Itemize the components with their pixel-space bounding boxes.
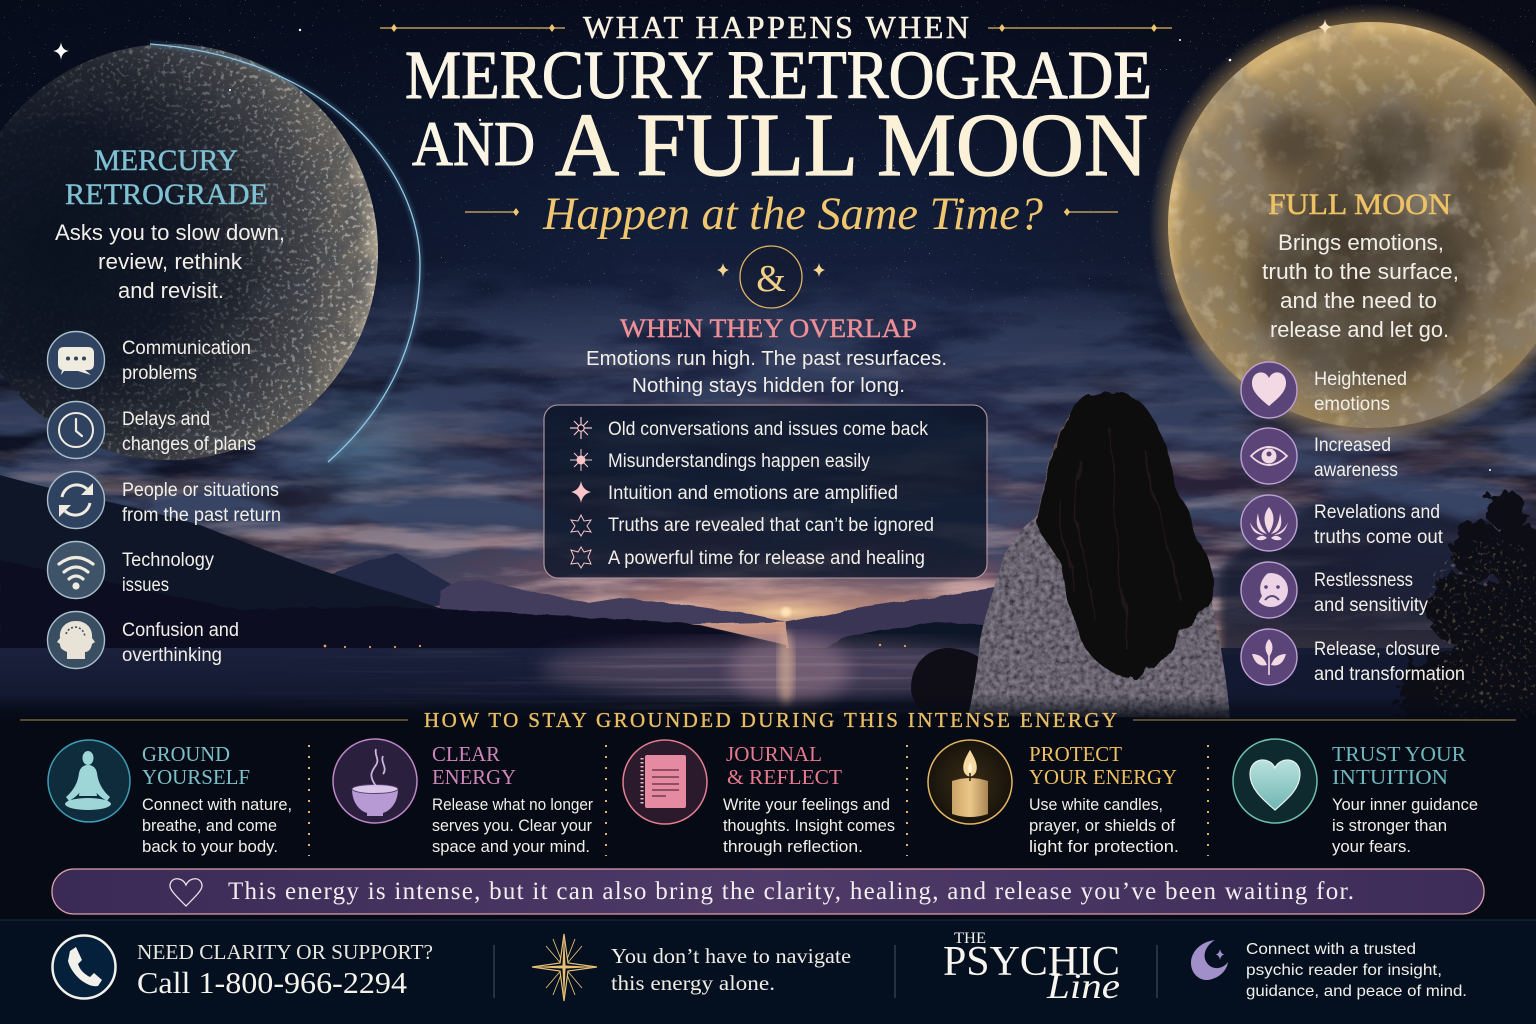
panel: full moon: [1241, 188, 1465, 685]
mercury item: delays: [48, 402, 256, 458]
full moon heading: FULL MOON: [1268, 188, 1451, 221]
moon item: revelations: truths come out: [1314, 527, 1444, 548]
mercury item: technology: [48, 542, 214, 598]
decorative sparkle stars: [53, 19, 1491, 471]
connect message: Connect with a trusted: [1246, 941, 1416, 958]
tip: trust your intuition: [1233, 739, 1478, 856]
mercury item: delays: Delays and: [122, 409, 210, 430]
tip: journal and reflect: [623, 740, 895, 856]
mercury item: past returns: [48, 472, 281, 528]
tip: protect your energy: light for protection.: [1029, 837, 1179, 856]
mercury description: and revisit.: [118, 278, 224, 303]
mercury item: past returns: from the past return: [122, 505, 281, 526]
mercury item: technology: issues: [122, 575, 169, 596]
call to action: Call 1-800-966-2294: [137, 965, 408, 1000]
panel: mercury retrograde: [48, 144, 285, 668]
mercury item: communication: problems: [122, 363, 197, 384]
full moon description: Brings emotions,: [1278, 230, 1444, 255]
tip: protect your energy: prayer, or shields of: [1029, 816, 1175, 835]
tip: clear energy: [333, 739, 593, 856]
tip: clear energy: space and your mind.: [432, 837, 590, 856]
overlap intro: Nothing stays hidden for long.: [632, 375, 905, 397]
connect message: [1191, 940, 1467, 1000]
tip: ground yourself: YOURSELF: [142, 765, 250, 789]
moon item: release: and transformation: [1314, 664, 1465, 685]
overlap list items: [608, 419, 934, 569]
overlap list star icons: [570, 417, 592, 568]
mercury description: Asks you to slow down,: [55, 220, 285, 245]
moon item: awareness: Increased: [1314, 435, 1391, 456]
section heading: stay grounded: HOW TO STAY GROUNDED DURING THIS INTENSE ENERGY: [424, 708, 1117, 732]
moon item: revelations: Revelations and: [1314, 502, 1440, 523]
lower dark band: [0, 695, 1536, 920]
moon item: revelations: [1241, 495, 1444, 551]
overlap heading: WHEN THEY OVERLAP: [620, 314, 917, 343]
ampersand badge: &: [756, 258, 786, 300]
logo: the psychic line: [943, 930, 1120, 1006]
title line 3 right: A FULL MOON: [555, 96, 1148, 195]
illustration: mountains, lake and trees: [0, 475, 1536, 750]
moon item: restlessness: and sensitivity: [1314, 595, 1428, 616]
moon item: emotions: Heightened: [1314, 369, 1407, 390]
tip: trust your intuition: TRUST YOUR: [1332, 742, 1466, 766]
mercury item: delays: changes of plans: [122, 434, 256, 455]
full moon description: and the need to: [1280, 288, 1437, 313]
quote banner: [52, 869, 1484, 914]
tip: protect your energy: [928, 740, 1179, 856]
reassurance message: [532, 934, 851, 1001]
subtitle: Happen at the Same Time?: [542, 188, 1043, 240]
mercury item: overthinking: [48, 612, 239, 668]
tip: journal and reflect: & REFLECT: [727, 765, 842, 789]
overlap list box: [544, 405, 987, 578]
tip: trust your intuition: INTUITION: [1332, 765, 1448, 789]
tip: clear energy: Release what no longer: [432, 795, 593, 814]
moon item: emotions: [1241, 362, 1407, 418]
mercury item: technology: Technology: [122, 550, 214, 571]
mercury heading: MERCURY: [94, 144, 238, 177]
moon item: restlessness: Restlessness: [1314, 570, 1413, 591]
tip: trust your intuition: is stronger than: [1332, 816, 1447, 835]
illustration: full moon: [1149, 3, 1536, 447]
mercury description: [55, 220, 285, 303]
tip: protect your energy: Use white candles,: [1029, 795, 1163, 814]
full moon description: truth to the surface,: [1262, 259, 1459, 284]
connect message: psychic reader for insight,: [1246, 962, 1442, 979]
mercury item: communication: [48, 332, 251, 388]
tip: journal and reflect: JOURNAL: [726, 742, 822, 766]
full moon description: [1262, 230, 1459, 342]
moon item: emotions: emotions: [1314, 394, 1390, 415]
tip: trust your intuition: your fears.: [1332, 837, 1411, 856]
call to action: NEED CLARITY OR SUPPORT?: [137, 940, 433, 964]
tip: ground yourself: GROUND: [142, 742, 230, 766]
tips row: [48, 739, 1478, 856]
logo: the psychic line: Line: [1046, 966, 1120, 1006]
overlap list items: Intuition and emotions are amplified: [608, 483, 898, 504]
title line 3 left: AND: [412, 108, 535, 179]
title block: [380, 9, 1172, 240]
illustration: seated woman silhouette: [911, 393, 1230, 720]
mercury item: overthinking: Confusion and: [122, 620, 239, 641]
overlap list items: Old conversations and issues come back: [608, 419, 928, 440]
title ornaments: [380, 24, 1172, 216]
tip: clear energy: ENERGY: [432, 765, 516, 789]
panel: when they overlap: [544, 314, 987, 578]
overlap list items: Truths are revealed that can’t be ignored: [608, 515, 934, 536]
moon item: release: [1241, 629, 1465, 685]
overlap list items: A powerful time for release and healing: [608, 548, 925, 569]
reassurance message: You don’t have to navigate: [611, 944, 851, 968]
footer: [0, 920, 1536, 1024]
mercury heading: RETROGRADE: [65, 178, 268, 211]
tip: ground yourself: Connect with nature,: [142, 795, 292, 814]
overlap list items: Misunderstandings happen easily: [608, 451, 870, 472]
moon item: restlessness: [1241, 562, 1428, 618]
reassurance message: this energy alone.: [611, 971, 775, 995]
moon item: awareness: [1241, 428, 1398, 484]
tip: journal and reflect: thoughts. Insight comes: [723, 816, 895, 835]
night sky background: [0, 0, 1536, 648]
ampersand badge: [717, 246, 825, 308]
tip: ground yourself: [48, 740, 292, 856]
tip: trust your intuition: Your inner guidance: [1332, 795, 1478, 814]
tip: ground yourself: back to your body.: [142, 837, 278, 856]
tip: journal and reflect: through reflection.: [723, 837, 863, 856]
tip: ground yourself: breathe, and come: [142, 816, 277, 835]
mercury description: review, rethink: [98, 249, 243, 274]
call to action: [52, 936, 433, 1000]
moon item: awareness: awareness: [1314, 460, 1398, 481]
logo: the psychic line: PSYCHIC: [943, 939, 1120, 985]
overlap intro: [586, 348, 947, 397]
full moon description: release and let go.: [1270, 317, 1449, 342]
title line 2: MERCURY RETROGRADE: [405, 37, 1152, 113]
mercury item: communication: Communication: [122, 338, 251, 359]
moon item: release: Release, closure: [1314, 639, 1440, 660]
tip: clear energy: serves you. Clear your: [432, 816, 592, 835]
mercury item: overthinking: overthinking: [122, 645, 222, 666]
tip: protect your energy: YOUR ENERGY: [1029, 765, 1177, 789]
quote banner: This energy is intense, but it can also bring the clarity, healing, and release you’ve been waiting for.: [228, 878, 1354, 905]
illustration: mercury planet: [0, 44, 420, 462]
mercury item: past returns: People or situations: [122, 480, 279, 501]
logo: the psychic line: THE: [954, 930, 986, 947]
title line 1: WHAT HAPPENS WHEN: [583, 9, 969, 45]
tip: journal and reflect: Write your feelings and: [723, 795, 890, 814]
connect message: guidance, and peace of mind.: [1246, 983, 1467, 1000]
mercury heading: [65, 144, 268, 211]
tip: protect your energy: PROTECT: [1029, 742, 1122, 766]
tip: clear energy: CLEAR: [432, 742, 500, 766]
overlap intro: Emotions run high. The past resurfaces.: [586, 348, 947, 370]
